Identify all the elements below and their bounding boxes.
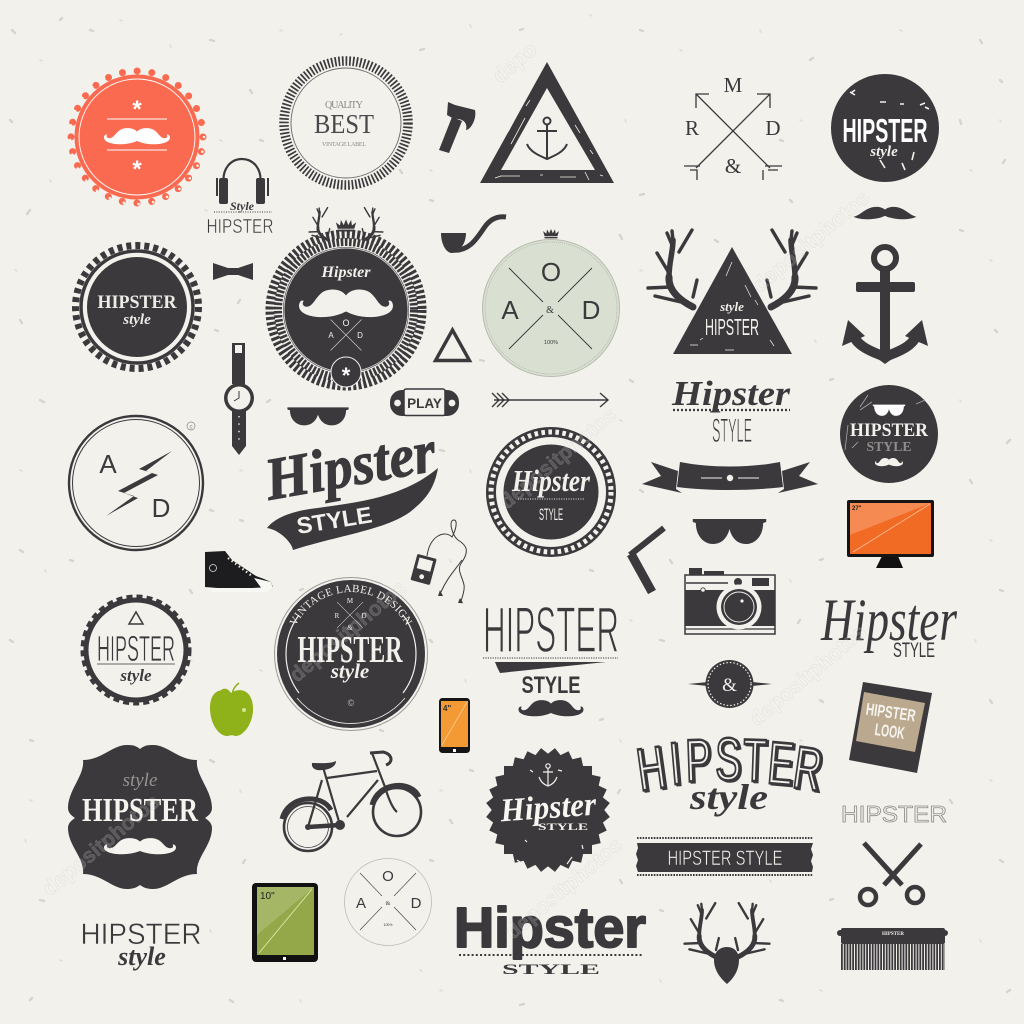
icon: tablet 10 inch: 10" bbox=[260, 891, 275, 902]
icon: axe bbox=[439, 102, 475, 153]
title: thin HIPSTER with banner and mustache bbox=[483, 593, 619, 716]
badge: vintage label design: D bbox=[361, 612, 367, 620]
icon: bicycle bbox=[282, 752, 421, 851]
badge: triangle ring hipster style: HIPSTER bbox=[98, 292, 177, 313]
watermark: depositphotos: depositphotos bbox=[495, 403, 621, 514]
title: arched HIPSTER with style: P bbox=[684, 726, 712, 795]
title: Hipster Style bold italic: Hipster bbox=[671, 374, 790, 413]
badge: green A O D monogram with crown: A bbox=[501, 295, 519, 325]
title: inline HIPSTER style: style bbox=[117, 942, 166, 971]
badge: serrated hipster style bbox=[83, 597, 189, 703]
icon: polaroid hipster look: LOOK bbox=[874, 720, 906, 743]
title: arched HIPSTER with style: T bbox=[742, 726, 768, 795]
monogram: crossed arrows R M D bbox=[684, 73, 782, 180]
icon: play game controller: PLAY bbox=[407, 396, 442, 411]
badge: small A O D monogram bbox=[344, 858, 432, 946]
badge: antlers on triangle style hipster bbox=[648, 230, 816, 354]
icon: polaroid hipster look: HIPSTER bbox=[865, 700, 917, 725]
badge: small A O D monogram: D bbox=[411, 895, 422, 912]
icon: folding razor bbox=[630, 528, 664, 592]
title: inline HIPSTER style: HIPSTER bbox=[80, 918, 202, 951]
watermark: depositphotos: depositphotos bbox=[745, 620, 871, 731]
badge: green A O D monogram with crown: 100% bbox=[544, 340, 558, 346]
badge: antlers on triangle style hipster: style bbox=[719, 299, 744, 314]
logo: Hipster Style swoosh bbox=[259, 418, 441, 550]
monogram: crossed arrows R M D: M bbox=[724, 73, 743, 97]
watermark: depositphotos: depositphotos bbox=[501, 833, 627, 944]
title: Hipster Style bold italic bbox=[671, 374, 790, 450]
badge: small A O D monogram: & bbox=[386, 901, 391, 907]
icon: outlined triangle bbox=[436, 330, 470, 360]
badge: vintage label design: style bbox=[330, 659, 369, 683]
badge: vintage label design: R bbox=[335, 612, 340, 620]
badge: distressed hipster circle: style bbox=[869, 144, 898, 160]
monogram: crossed arrows R M D: D bbox=[765, 116, 781, 140]
icon: desktop monitor bbox=[847, 500, 934, 568]
title: arched HIPSTER with style: E bbox=[765, 728, 797, 798]
title: arched HIPSTER with style: H bbox=[633, 733, 670, 804]
title: arched HIPSTER with style: S bbox=[715, 725, 741, 793]
badge: star seal hipster: Hipster bbox=[498, 787, 599, 829]
icon: vintage camera bbox=[685, 568, 775, 634]
title: Hipster Style bold italic: STYLE bbox=[712, 412, 752, 450]
badge: A D lightning circle bbox=[69, 416, 203, 550]
badge: wreath and mustache emblem: Hipster bbox=[321, 264, 371, 281]
icon: large anchor bbox=[842, 247, 928, 364]
badge: sunglasses hipster circle: STYLE bbox=[866, 440, 912, 455]
badge: small A O D monogram: O bbox=[382, 868, 394, 885]
banner: hipster style: HIPSTER STYLE bbox=[668, 847, 782, 870]
badge: vintage label design: M bbox=[347, 597, 354, 605]
icon: scissors bbox=[860, 843, 923, 905]
badge: vintage label design: HIPSTER bbox=[298, 629, 403, 671]
title: bold rounded Hipster with style: Hipster bbox=[454, 896, 646, 960]
monogram: crossed arrows R M D: & bbox=[725, 154, 741, 178]
badge: A D lightning circle: c bbox=[190, 424, 192, 430]
icon: small mustache bbox=[854, 207, 916, 219]
icon: play game controller bbox=[390, 389, 459, 416]
icon: wrist watch bbox=[224, 343, 254, 455]
logo: Hipster Style swoosh: STYLE bbox=[295, 501, 374, 539]
badge: small A O D monogram: 100% bbox=[384, 923, 392, 927]
badge: small A O D monogram: A bbox=[356, 895, 366, 912]
badge: antlers on triangle style hipster: HIPSTER bbox=[705, 314, 759, 340]
icon: desktop monitor: 27" bbox=[852, 506, 862, 512]
title: bold rounded Hipster with style: STYLE bbox=[502, 962, 600, 978]
watermark: depositphotos bbox=[38, 38, 874, 944]
arrow: long right arrow bbox=[492, 393, 608, 407]
monogram: crossed arrows R M D: R bbox=[685, 116, 699, 140]
icon: headphones with style hipster bbox=[206, 159, 274, 238]
watermark: depositphotos: depositphotos bbox=[748, 186, 874, 297]
text: HIPSTER bbox=[483, 593, 619, 666]
badge: wreath and mustache emblem bbox=[270, 208, 422, 388]
icon: music player with earphones bbox=[410, 520, 466, 603]
icon: bow tie bbox=[213, 263, 253, 280]
badge: bracket frame hipster mustache bbox=[68, 745, 212, 889]
badge: coral mustache seal bbox=[70, 70, 204, 204]
antlers and crown bbox=[309, 208, 383, 240]
icon: flat sunglasses bbox=[287, 407, 349, 425]
title: arched HIPSTER with style bbox=[633, 725, 826, 817]
icon: comb bbox=[837, 928, 948, 957]
badge: rope hipster style bbox=[491, 432, 611, 552]
title: arched HIPSTER with style: R bbox=[789, 733, 826, 804]
badge: green A O D monogram with crown: D bbox=[582, 295, 600, 325]
icon: comb: HIPSTER bbox=[882, 932, 904, 937]
badge: vintage label design: © bbox=[348, 698, 355, 708]
badge: star seal hipster: STYLE bbox=[538, 822, 588, 832]
badge: green A O D monogram with crown: & bbox=[546, 305, 554, 316]
badge: sunglasses hipster circle: HIPSTER bbox=[850, 420, 928, 441]
badge: A D lightning circle: D bbox=[152, 493, 170, 523]
title: outlined HIPSTER: HIPSTER bbox=[841, 801, 947, 827]
badge: serrated hipster style: HIPSTER bbox=[97, 628, 175, 669]
badge: wreath and mustache emblem: O bbox=[342, 318, 350, 328]
icon: polaroid hipster look bbox=[849, 682, 932, 773]
badge: coral mustache seal: * bbox=[132, 156, 142, 183]
icon: deer head with antlers bbox=[684, 903, 770, 984]
icon: tablet 10 inch bbox=[252, 883, 318, 962]
icon: phone 4 inch: 4" bbox=[443, 704, 451, 713]
badge: wreath and mustache emblem: A bbox=[328, 331, 334, 340]
badge: quality best vintage label: BEST bbox=[314, 109, 374, 139]
title: Hipster script with style bbox=[820, 587, 957, 662]
badge: rope hipster style: STYLE bbox=[539, 505, 563, 524]
badge: green A O D monogram with crown: O bbox=[541, 257, 561, 287]
badge: bracket frame hipster mustache: style bbox=[123, 770, 157, 791]
icon: high-top sneaker bbox=[205, 551, 273, 592]
title: thin HIPSTER with banner and mustache: STYLE bbox=[522, 672, 580, 699]
badge: vintage label design: & bbox=[347, 624, 353, 632]
title: arched HIPSTER with style: I bbox=[667, 729, 683, 798]
icon: pipe bbox=[441, 217, 506, 253]
watermark: depositphotos: depositphotos bbox=[285, 576, 411, 687]
icon: headphones with style hipster: Style bbox=[230, 199, 255, 213]
badge: sunglasses hipster circle bbox=[840, 385, 938, 483]
badge: distressed hipster circle bbox=[831, 74, 939, 182]
badge: triangle ring hipster style: style bbox=[122, 312, 151, 328]
badge: triangle ring hipster style bbox=[76, 246, 198, 368]
badge: wreath and mustache emblem: * bbox=[342, 363, 351, 388]
badge: serrated hipster style: style bbox=[119, 666, 152, 685]
icon: green apple bbox=[210, 683, 253, 736]
badge: wreath and mustache emblem: D bbox=[357, 331, 363, 340]
badge: green A O D monogram with crown bbox=[482, 229, 620, 376]
watermark: depositphotos: depo bbox=[488, 38, 542, 88]
icon: sunglasses bbox=[693, 519, 766, 544]
logo: Hipster Style swoosh: Hipster bbox=[259, 418, 441, 513]
ribbon banner bbox=[642, 462, 818, 493]
icon: headphones with style hipster: HIPSTER bbox=[206, 216, 274, 238]
badge: vintage label design: VINTAGE LABEL DESIGN bbox=[289, 584, 412, 625]
badge: distressed hipster circle: HIPSTER bbox=[842, 112, 928, 149]
title: Hipster script with style: Hipster bbox=[820, 587, 957, 653]
badge: star seal hipster bbox=[486, 748, 610, 872]
title: Hipster script with style: STYLE bbox=[893, 639, 935, 662]
badge: rope hipster style: Hipster bbox=[511, 463, 591, 498]
badge: quality best vintage label: VINTAGE LABEL bbox=[322, 142, 366, 148]
badge: triangle with anchor bbox=[480, 62, 614, 183]
title: arched HIPSTER with style: style bbox=[689, 777, 768, 817]
watermark: depositphotos: depositphotos bbox=[38, 790, 164, 901]
badge: ampersand medallion bbox=[688, 660, 772, 708]
badge: coral mustache seal: * bbox=[132, 96, 142, 123]
badge: ampersand medallion: & bbox=[722, 675, 737, 696]
badge: quality best vintage label bbox=[284, 61, 408, 185]
badge: bracket frame hipster mustache: HIPSTER bbox=[82, 792, 198, 829]
badge: A D lightning circle: A bbox=[99, 449, 117, 479]
title: inline HIPSTER style bbox=[80, 918, 202, 971]
badge: quality best vintage label: QUALITY bbox=[325, 100, 363, 111]
badge: vintage label design bbox=[274, 577, 428, 731]
icon: phone 4 inch bbox=[439, 698, 470, 753]
banner: hipster style bbox=[636, 838, 813, 875]
